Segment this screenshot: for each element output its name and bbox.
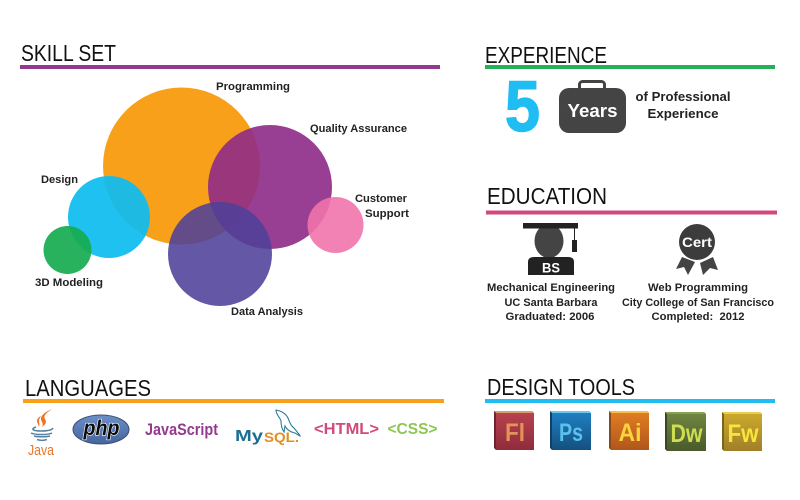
heading: experience: EXPERIENCE — [485, 42, 607, 68]
bubble: 3d modeling — [44, 226, 92, 274]
label: customer support — [355, 193, 409, 220]
heading: design tools — [485, 374, 775, 403]
logo: java: Java — [28, 442, 55, 459]
text: mechanical engineering degree: UC Santa Barbara — [504, 297, 598, 309]
heading: design tools: DESIGN TOOLS — [487, 374, 635, 400]
icon: briefcase years — [559, 82, 626, 133]
heading: education: EDUCATION — [487, 183, 607, 209]
label: programming: Programming — [216, 81, 290, 93]
icon: illustrator — [609, 411, 649, 450]
logo: java — [28, 409, 55, 459]
text: mechanical engineering degree: Graduated: 2006 — [506, 311, 594, 323]
icon: photoshop: Ps — [559, 419, 583, 447]
text: of professional experience: of Professional — [636, 89, 730, 104]
heading: languages — [23, 375, 444, 403]
bubble: data analysis — [168, 202, 272, 306]
logo: javascript: JavaScript — [145, 420, 218, 439]
heading: skill set — [20, 40, 440, 69]
label: customer support: Support — [365, 208, 409, 220]
icon: flash — [494, 411, 534, 450]
icon: dreamweaver — [665, 412, 706, 451]
text: of professional experience: Experience — [648, 106, 718, 121]
text: web programming certificate — [622, 282, 774, 323]
label: quality assurance: Quality Assurance — [310, 123, 407, 135]
text: mechanical engineering degree — [487, 282, 615, 323]
icon: certificate ribbon — [676, 224, 718, 275]
heading: experience — [485, 42, 775, 69]
label: customer support: Customer — [355, 193, 408, 205]
icon: illustrator: Ai — [618, 419, 642, 447]
text: web programming certificate: Web Programming — [648, 282, 748, 294]
logo: mysql: SQL. — [264, 429, 299, 445]
logo: mysql: My — [235, 428, 263, 445]
logo: css: <CSS> — [388, 421, 438, 438]
logo: php — [73, 415, 129, 444]
big number 5: 5 — [505, 68, 540, 147]
bubble: quality assurance — [208, 125, 332, 249]
icon: photoshop — [550, 411, 591, 450]
icon: flash: Fl — [505, 419, 525, 447]
label: design: Design — [41, 174, 78, 186]
heading: skill set: SKILL SET — [21, 40, 116, 66]
icon: fireworks: Fw — [728, 420, 759, 448]
text: of professional experience — [636, 89, 730, 121]
text: web programming certificate: City College of San Francisco — [622, 297, 774, 309]
label: 3d modeling: 3D Modeling — [35, 277, 103, 289]
chart: skill set bubbles — [35, 81, 409, 318]
icon: graduate BS — [523, 223, 578, 276]
logo: php: php — [83, 417, 120, 440]
icon: dreamweaver: Dw — [670, 420, 703, 448]
label: data analysis: Data Analysis — [231, 306, 303, 318]
logo: mysql — [235, 410, 300, 445]
text: web programming certificate: Completed: 2012 — [652, 311, 744, 323]
icon: fireworks — [722, 412, 762, 451]
icon: briefcase years: Years — [568, 101, 618, 121]
heading: education — [486, 183, 777, 214]
bubble: customer support — [308, 197, 364, 253]
bubble: design — [68, 176, 150, 258]
heading: languages: LANGUAGES — [25, 375, 151, 401]
bubble: programming — [103, 88, 260, 244]
icon: graduate BS: BS — [542, 260, 560, 276]
logo: html: <HTML> — [314, 421, 379, 438]
text: mechanical engineering degree: Mechanical Engineering — [487, 282, 615, 294]
icon: certificate ribbon: Cert — [682, 234, 712, 250]
